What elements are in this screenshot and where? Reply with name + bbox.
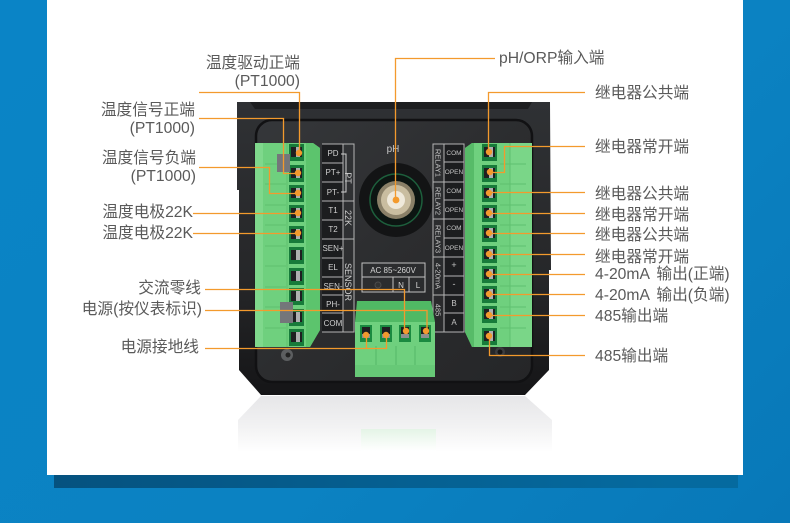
right label: 继电器公共端 2: 继电器公共端 <box>595 186 689 203</box>
BNC pH connector: pH <box>387 144 399 155</box>
left label: 温度驱动正端 <box>206 54 300 90</box>
left terminal labels: SEN+ <box>322 244 344 253</box>
orange terminal dots <box>295 149 493 339</box>
left terminal labels: COM <box>324 319 343 328</box>
left terminal labels: SENSOR <box>343 263 353 302</box>
BNC pH connector <box>359 144 433 237</box>
right terminal labels: COM <box>446 188 462 195</box>
left label: 温度电极22K 2: 温度电极22K <box>102 225 193 242</box>
left label: 电源接地线: 电源接地线 <box>121 339 199 356</box>
power labels: N <box>398 281 404 290</box>
recessed face <box>256 120 532 382</box>
left label: 温度电极22K 1: 温度电极22K <box>102 204 193 221</box>
resistor <box>280 302 293 323</box>
right terminal labels: 485 <box>434 304 442 316</box>
left label: 温度信号正端 <box>101 101 195 137</box>
right terminal labels: RELAY3 <box>434 225 442 253</box>
bottom green power terminal block <box>355 301 435 377</box>
device body <box>237 102 551 395</box>
right terminal labels: COM <box>446 150 462 157</box>
right label: 继电器常开端 2: 继电器常开端 <box>595 207 689 224</box>
right label: 继电器公共端 3: 继电器公共端 <box>595 227 689 244</box>
left terminal labels: T1 <box>328 206 338 215</box>
right terminal labels: OPEN <box>445 207 464 214</box>
right label: 4-20mA 输出(正端): 4-20mA 输出(正端) <box>595 266 730 283</box>
left label: 温度信号负端: (PT1000) <box>131 168 196 185</box>
left green terminal block <box>255 143 320 347</box>
left terminal labels: 22K <box>343 210 353 226</box>
left label: 温度信号负端 <box>102 149 196 185</box>
right label: 485输出端 1: 485输出端 <box>595 308 668 325</box>
power labels: AC 85~260V <box>370 266 416 275</box>
panel shadow <box>54 475 738 488</box>
left label: 温度信号负端: 温度信号负端 <box>102 150 196 167</box>
right terminal labels: + <box>451 260 457 270</box>
power labels <box>362 263 425 292</box>
left label: 电源(按仪表标识): 电源(按仪表标识) <box>82 301 202 318</box>
left label: 温度驱动正端: 温度驱动正端 <box>206 55 300 72</box>
right terminal labels: - <box>452 279 456 289</box>
right label: 485输出端 2: 485输出端 <box>595 348 668 365</box>
top label: pH/ORP输入端: pH/ORP输入端 <box>499 50 604 67</box>
right green terminal block <box>465 143 532 347</box>
screw holes <box>281 347 505 361</box>
right terminal labels: RELAY1 <box>434 149 442 177</box>
left terminal labels: SEN- <box>323 282 343 291</box>
left terminal labels: PT <box>343 172 353 184</box>
right terminal labels: COM <box>446 225 462 232</box>
resistor <box>277 154 290 172</box>
left label: 交流零线: 交流零线 <box>138 280 201 297</box>
left label: 温度信号正端: 温度信号正端 <box>101 102 195 119</box>
right terminal labels: A <box>451 318 457 327</box>
right terminal labels: 4-20mA <box>434 263 442 289</box>
left terminal labels: T2 <box>328 225 338 234</box>
right terminal labels: OPEN <box>445 245 464 252</box>
right label: 继电器常开端 3: 继电器常开端 <box>595 249 689 266</box>
left terminal labels: PT- <box>327 188 340 197</box>
right terminal labels <box>433 144 464 332</box>
device reflection <box>238 396 552 452</box>
left terminal labels: PH- <box>326 300 340 309</box>
power labels: L <box>416 281 421 290</box>
left terminal labels: PD <box>327 149 339 158</box>
right terminal labels: B <box>451 299 457 308</box>
orange leader lines <box>193 58 585 356</box>
right terminal labels: RELAY2 <box>434 187 442 215</box>
right label: 继电器常开端 1: 继电器常开端 <box>595 139 689 156</box>
left label: 温度驱动正端: (PT1000) <box>235 73 300 90</box>
left label: 温度信号正端: (PT1000) <box>130 120 195 137</box>
left terminal labels <box>322 144 354 332</box>
left terminal labels: PT+ <box>326 168 341 177</box>
left terminal labels: EL <box>328 263 338 272</box>
right label: 继电器公共端 1: 继电器公共端 <box>595 85 689 102</box>
right label: 4-20mA 输出(负端): 4-20mA 输出(负端) <box>595 287 730 304</box>
right terminal labels: OPEN <box>445 169 464 176</box>
